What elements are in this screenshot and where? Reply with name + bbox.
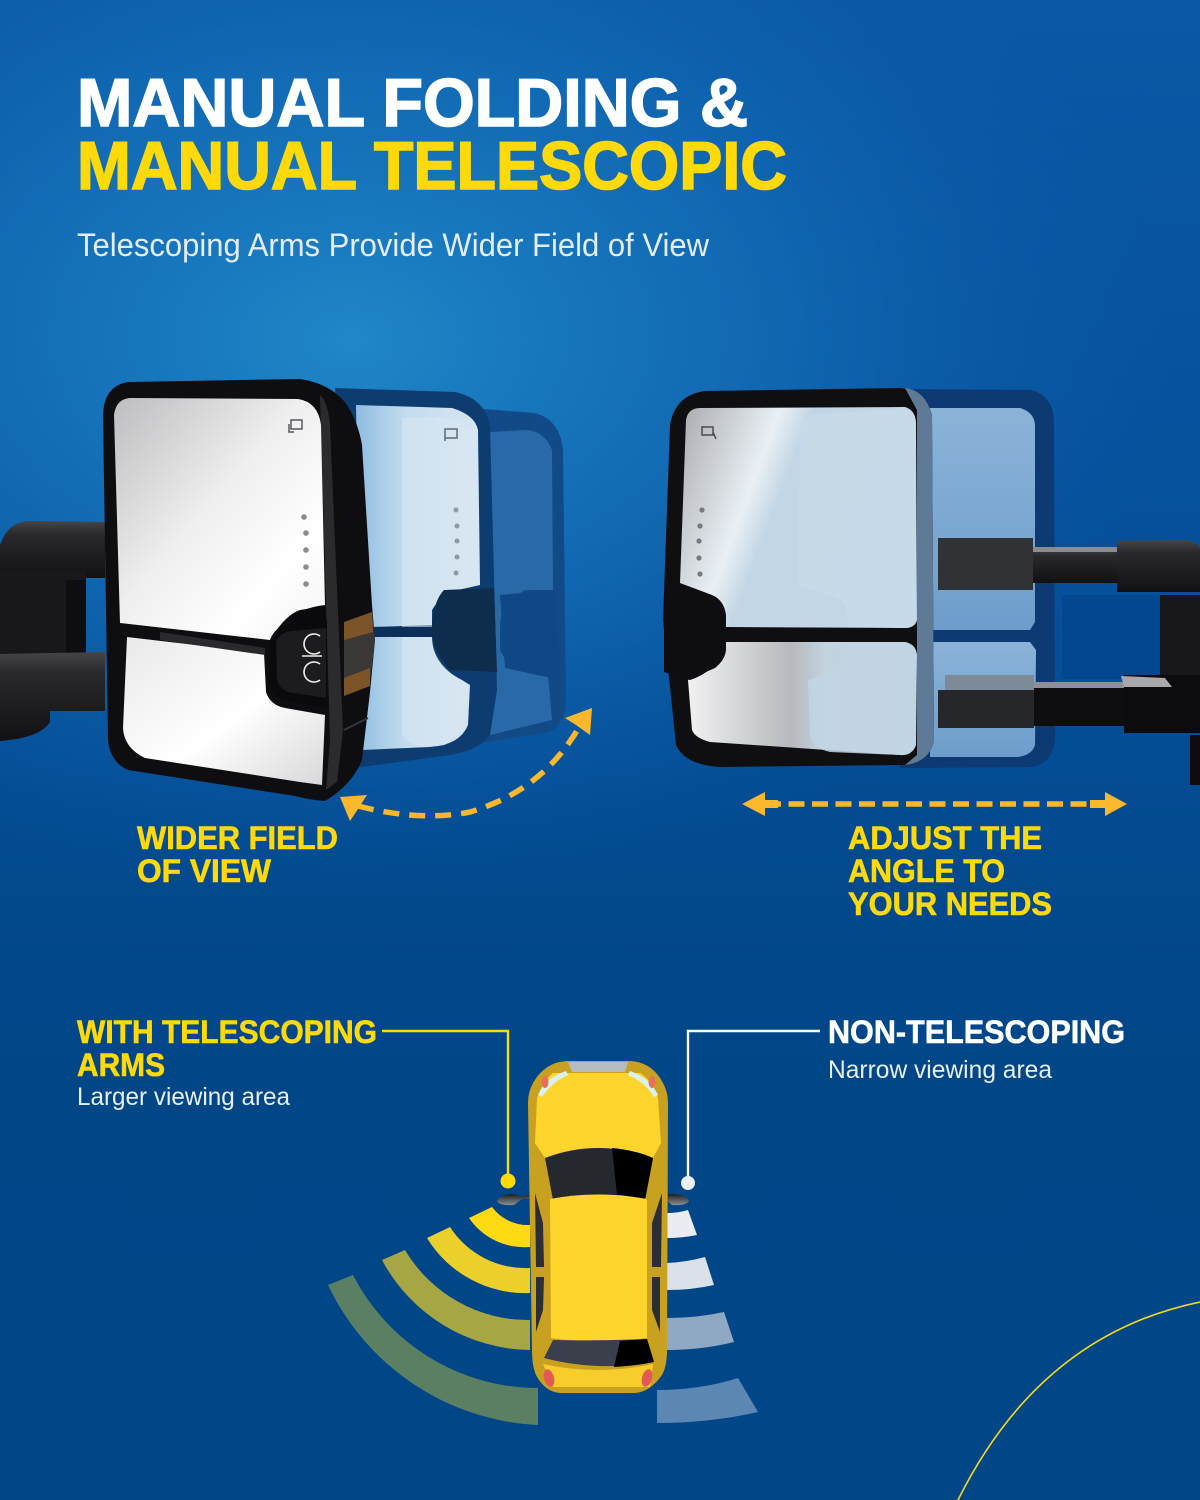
arrow: curved double-headed dashed [340, 708, 592, 821]
label: wider field of view: WIDER FIELD [137, 820, 338, 856]
side windows [535, 1193, 662, 1332]
amber strip [344, 612, 375, 696]
field of view arcs: non-telescoping [657, 1210, 758, 1423]
headlights [538, 1071, 658, 1097]
ghost mirror through glass [798, 408, 916, 755]
lower mirror glass [688, 642, 917, 755]
third ghost mirror [470, 408, 566, 745]
label: adjust the angle: ADJUST THE [848, 820, 1042, 856]
upper mirror glass [680, 407, 917, 628]
icon: heated glass badge [702, 427, 716, 439]
callout: non-telescoping [828, 1014, 1125, 1084]
telescoping arms [938, 538, 1200, 733]
callout: non-telescoping: Narrow viewing area [828, 1056, 1052, 1084]
title line 2: MANUAL TELESCOPIC [77, 128, 787, 204]
callout: with telescoping arms: Larger viewing area [77, 1083, 290, 1111]
field of view arcs: telescoping [328, 1207, 538, 1425]
label: adjust the angle: YOUR NEEDS [848, 886, 1052, 922]
housing seam [344, 718, 368, 730]
second ghost mirror [335, 388, 497, 768]
turn signal dots [454, 508, 460, 576]
label: adjust the angle: ANGLE TO [848, 853, 1005, 889]
front mirror housing [103, 379, 375, 801]
right mirror group [663, 388, 1200, 785]
puddle lamp module [664, 590, 722, 680]
callout: with telescoping arms: ARMS [77, 1047, 165, 1083]
windshield [545, 1148, 653, 1200]
trunk [543, 1364, 653, 1387]
callout: non-telescoping: NON-TELESCOPING [828, 1014, 1125, 1050]
front grille bar [568, 1062, 628, 1072]
label: wider field of view [137, 820, 338, 889]
subtitle: Telescoping Arms Provide Wider Field of View [77, 227, 710, 263]
leader line: yellow [382, 1031, 516, 1188]
black stalk bottom right [1190, 735, 1200, 785]
leader line: white [681, 1031, 820, 1190]
tail lights [542, 1368, 654, 1388]
arrow: straight double-headed dashed [742, 792, 1127, 816]
decorative circle outline [958, 1302, 1200, 1500]
mirror support arms [0, 521, 105, 741]
rear window [544, 1339, 654, 1367]
left mirror group [0, 379, 566, 801]
roof [550, 1194, 647, 1342]
lower mirror glass [123, 637, 325, 785]
car body [528, 1061, 668, 1393]
callout: with telescoping arms [77, 1014, 377, 1111]
front mirror frame [663, 388, 934, 767]
label: wider field of view: OF VIEW [137, 853, 272, 889]
turn signal dots [301, 514, 309, 587]
icon: heater badge [445, 429, 457, 441]
car top view [497, 1061, 689, 1393]
side mirrors [497, 1194, 689, 1205]
housing textured band [320, 395, 343, 790]
title line 1: MANUAL FOLDING & [77, 65, 748, 141]
label: adjust the angle [848, 820, 1052, 922]
title [77, 65, 787, 204]
rear ghost mirror [900, 389, 1160, 768]
icon: heated glass badge [289, 420, 302, 432]
hood [535, 1073, 661, 1158]
callout: with telescoping arms: WITH TELESCOPING [77, 1014, 377, 1050]
upper mirror glass [114, 398, 325, 640]
mirror divider highlight [160, 632, 265, 655]
turn signal dots [696, 507, 705, 577]
puddle lamp module [269, 605, 327, 708]
translucent frame right side [905, 388, 934, 765]
